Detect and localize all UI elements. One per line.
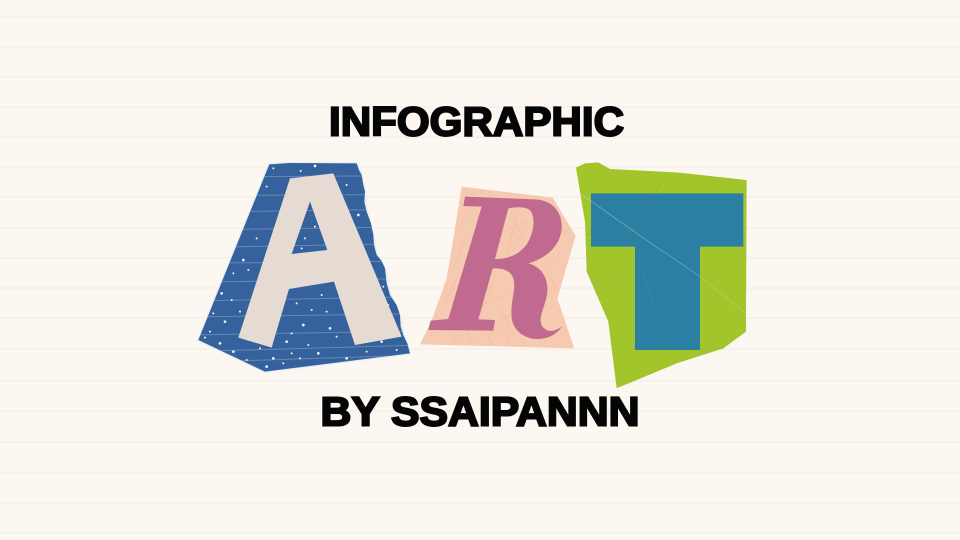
title: INFOGRAPHIC: INFOGRAPHIC [329,98,624,144]
paper texture [445,210,567,345]
letter T shape [591,193,743,350]
letter R shape [428,197,562,339]
cut-out letter T [576,162,747,388]
paper creases [580,185,746,350]
blue paper with ruled lines and specks [198,163,410,372]
torn edge of A paper [198,163,410,372]
cut-out letter R [420,187,576,348]
green paper [576,162,747,388]
letter A shape [238,173,402,348]
cut-out letter A [196,162,412,373]
peach paper [420,187,576,348]
byline: BY SSAIPANNN: BY SSAIPANNN [320,388,640,434]
